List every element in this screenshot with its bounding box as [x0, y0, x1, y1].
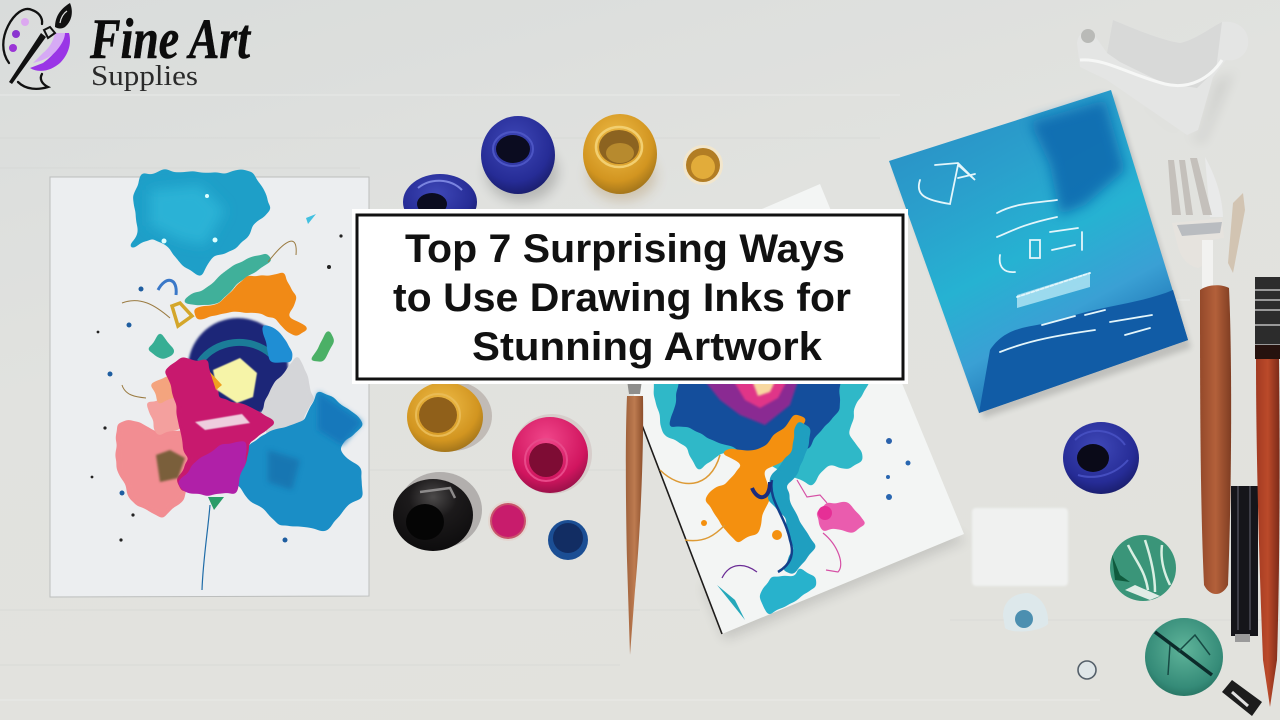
turquoise lower splash	[760, 567, 817, 617]
blue lower wash	[232, 390, 365, 529]
orange splash	[193, 273, 310, 337]
icon: white ceramic jug	[1077, 20, 1248, 144]
green streak	[183, 250, 273, 307]
coral wash	[115, 422, 198, 518]
logo wordmark: Supplies: Supplies	[91, 61, 198, 92]
icon: large wooden brush handle	[1200, 285, 1231, 594]
purple swirl	[700, 375, 800, 425]
cream swirl	[750, 375, 778, 396]
icon: fork shaped palette knife	[1168, 157, 1245, 288]
petal centre detail	[156, 450, 185, 482]
ink bottle: small glass	[1003, 593, 1048, 631]
blue stream	[768, 420, 817, 575]
pink swirl	[730, 375, 790, 408]
title box	[352, 209, 908, 384]
stem	[208, 497, 224, 510]
panel: centre swirling ink paper	[630, 184, 967, 640]
teal inner arch	[200, 342, 272, 362]
small ring and cap	[1078, 661, 1262, 716]
ink bottle: magenta	[512, 414, 592, 494]
logo: Fine Art Supplies	[3, 3, 252, 92]
pink blot	[817, 503, 866, 533]
dark blue bloom	[670, 375, 840, 453]
icon: palette and brush	[3, 3, 72, 89]
ink bottles group	[393, 114, 1223, 696]
ink bottle: black	[393, 472, 482, 551]
ink bottle: small blue	[548, 520, 588, 560]
title line 3: Stunning Artwork	[472, 325, 822, 369]
pale yellow center	[213, 358, 257, 403]
teal upper splash	[130, 172, 270, 277]
sky blue petal	[262, 322, 292, 362]
icon: thin paintbrush	[626, 380, 643, 655]
ink bottle: navy top	[481, 116, 558, 202]
title line 2: to Use Drawing Inks for	[393, 276, 851, 320]
orange stream	[707, 413, 808, 543]
gold stroke	[172, 303, 192, 326]
ink specks	[91, 234, 343, 542]
paper square	[972, 508, 1068, 586]
ink bottle: gold lower	[407, 381, 492, 452]
icon: black marker	[1231, 486, 1258, 642]
ink bottle: small magenta	[488, 501, 528, 541]
green bits	[147, 333, 173, 360]
turquoise leaf	[717, 585, 745, 620]
grey wash	[260, 355, 314, 442]
ink bottle: navy right	[1063, 422, 1139, 494]
ink bottle: small gold	[683, 145, 723, 185]
ink bottle: green lower	[1145, 618, 1223, 696]
dark ink disc	[188, 318, 288, 418]
logo wordmark: Fine Art: Fine Art	[89, 8, 252, 71]
teal bloom	[653, 375, 873, 487]
ink bottle: gold top	[583, 114, 657, 201]
panel: left painted paper	[50, 172, 369, 597]
title line 1: Top 7 Surprising Ways	[405, 227, 845, 271]
icon: dark red brush on the edge	[1255, 277, 1280, 707]
purple bloom	[178, 440, 247, 495]
panel: blue note card	[889, 90, 1191, 418]
ink bottle: green marbled	[1110, 535, 1176, 601]
magenta bloom	[167, 358, 275, 493]
ink bottle: navy partial	[403, 174, 477, 230]
